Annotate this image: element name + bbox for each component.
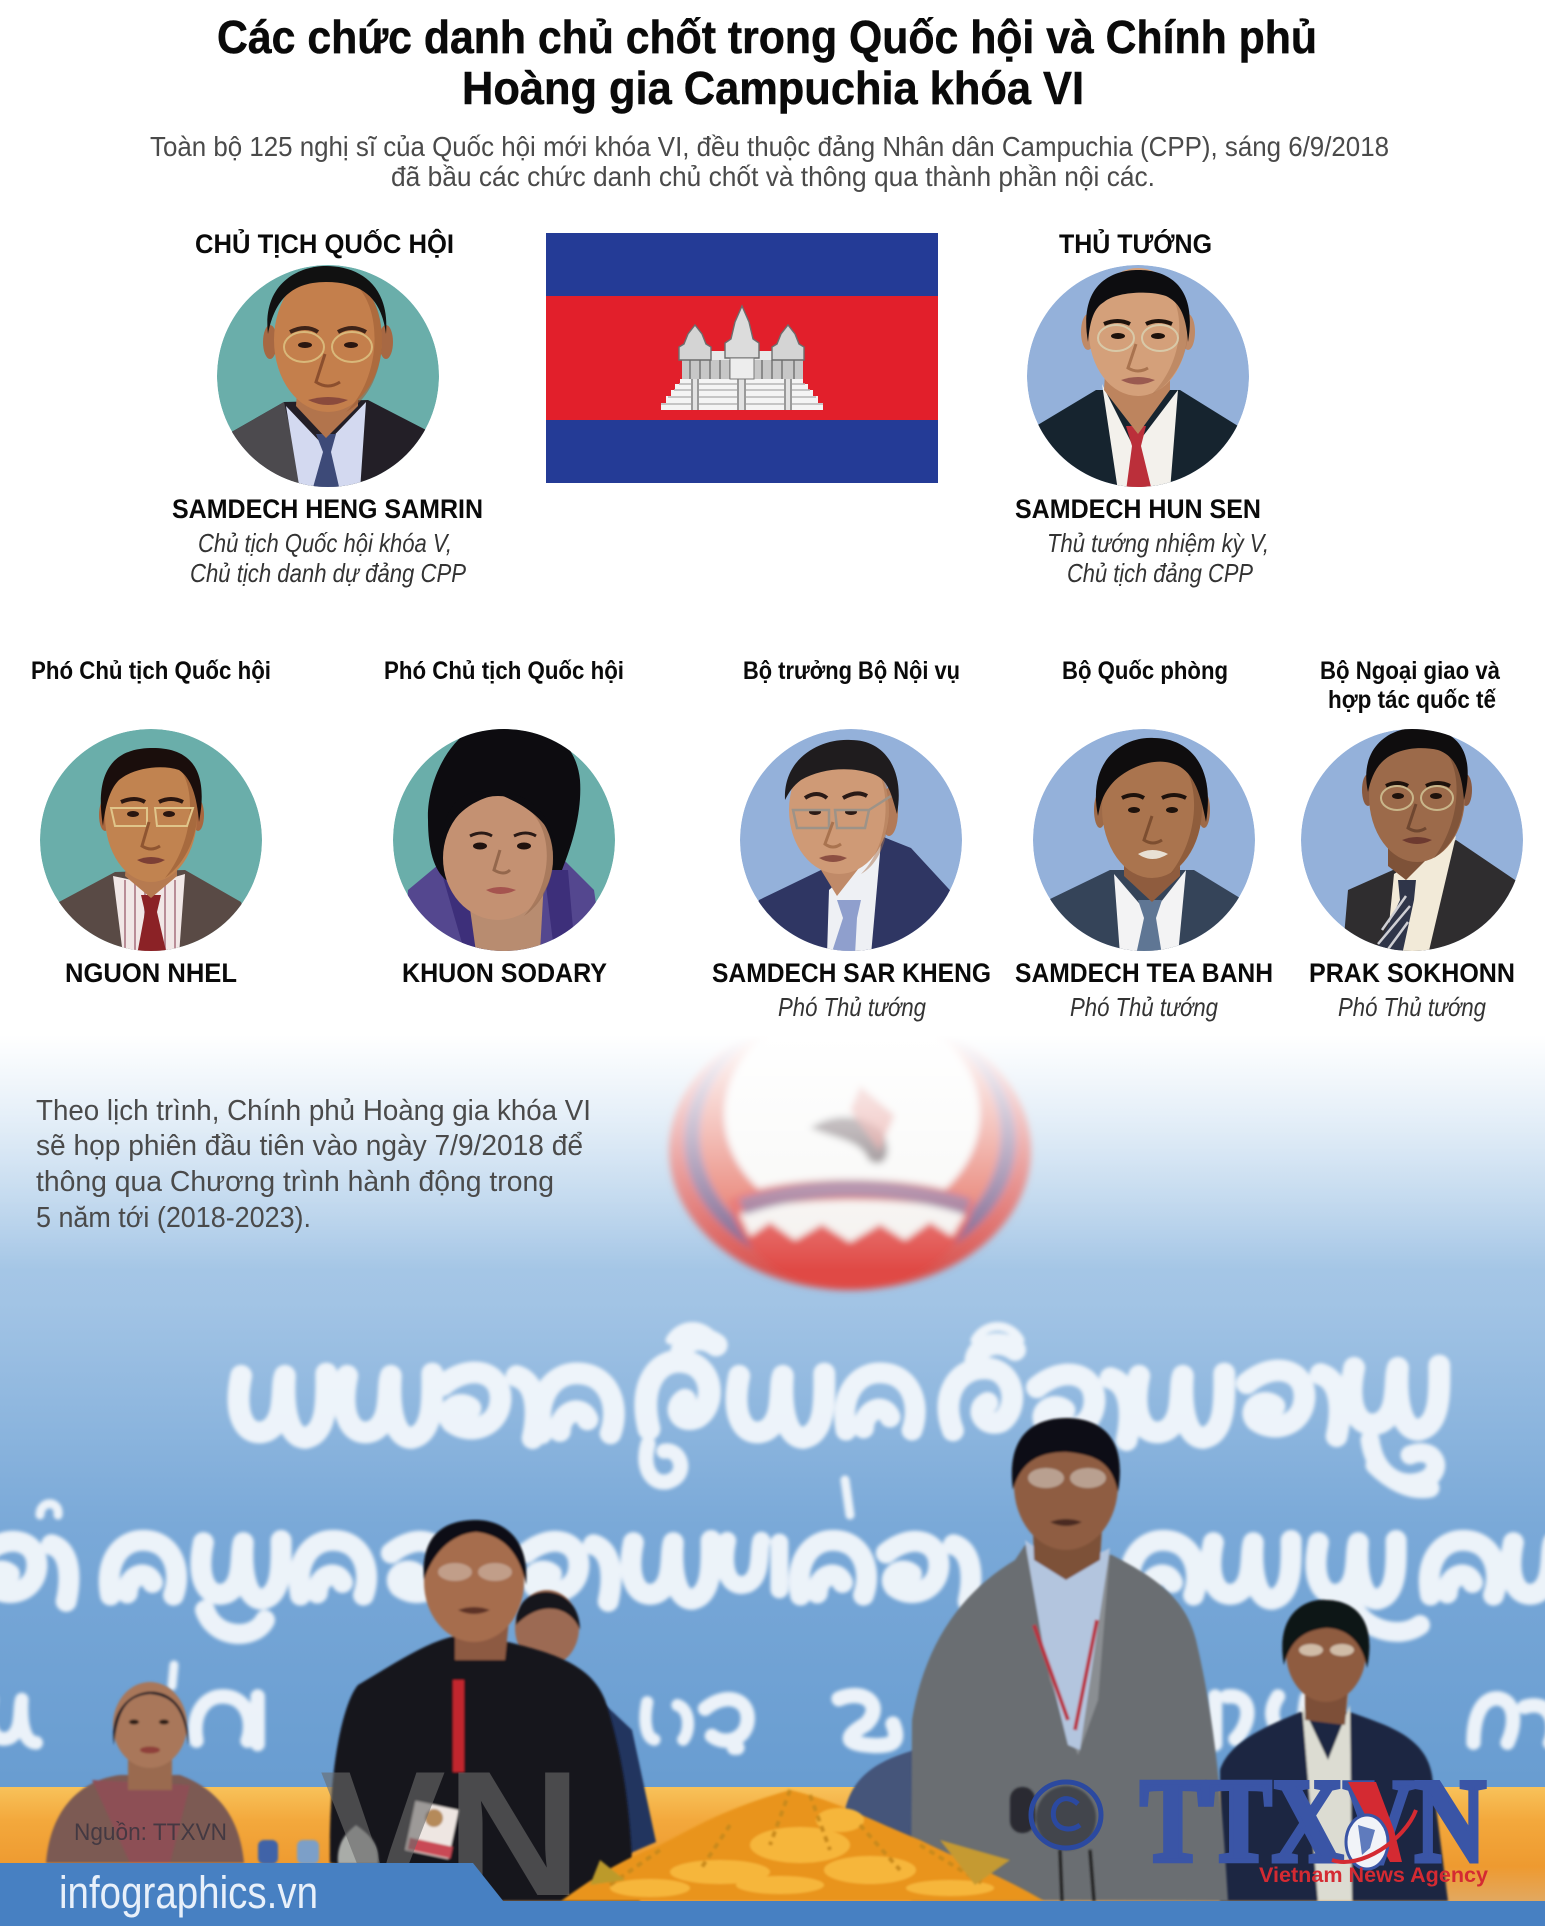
microphone	[1010, 1786, 1096, 1901]
orange stage band	[0, 1787, 1545, 1901]
name: NGUON NHEL	[65, 958, 237, 988]
name: SAMDECH HENG SAMRIN	[172, 494, 483, 524]
panel: Nguon Nhel	[31, 657, 271, 988]
name: KHUON SODARY	[402, 958, 607, 988]
title: Hoàng gia Campuchia khóa VI	[462, 62, 1084, 114]
person: Hun Sen in photo	[911, 1418, 1228, 1901]
subtitle: Toàn bộ 125 nghị sĩ của Quốc hội mới khóa VI, đều thuộc đảng Nhân dân Campuchia (CPP), sáng 6/9/2018	[150, 131, 1389, 162]
description: Phó Thủ tướng	[1338, 992, 1486, 1022]
text block: schedule note	[36, 1095, 591, 1234]
logo red V accent	[1348, 1782, 1402, 1862]
portrait: Prak Sokhonn	[1301, 728, 1524, 960]
person: man behind Heng Samrin	[515, 1590, 656, 1862]
role heading: Phó Chủ tịch Quốc hội	[384, 657, 624, 685]
title: Các chức danh chủ chốt trong Quốc hội và Chính phủ	[217, 11, 1317, 63]
description	[1047, 528, 1269, 588]
banner line one	[239, 1326, 1439, 1489]
role heading: hợp tác quốc tế	[1328, 686, 1496, 714]
role heading: Phó Chủ tịch Quốc hội	[31, 657, 271, 685]
panel: Chủ tịch Quốc hội	[172, 227, 483, 588]
person: man left of Hun Sen	[842, 1750, 930, 1860]
role heading: Bộ Quốc phòng	[1062, 657, 1228, 685]
flowers on podium	[561, 1790, 1044, 1901]
source credit: Nguồn: TTXVN	[74, 1819, 227, 1846]
flag of Cambodia	[546, 233, 938, 483]
name: PRAK SOKHONN	[1309, 958, 1515, 988]
panel: Prak Sokhonn	[1301, 657, 1524, 1022]
copyright circle mark	[1031, 1782, 1101, 1848]
banner lettering in photo, abstract blurred strokes	[0, 1326, 1545, 1748]
photo backdrop	[0, 1035, 1545, 1926]
flag temple emblem	[661, 306, 823, 410]
lanyard badge	[405, 1801, 459, 1859]
description: Phó Thủ tướng	[1070, 992, 1218, 1022]
party emblem on backdrop	[669, 1006, 1031, 1290]
role heading	[1320, 657, 1500, 714]
subtitle: đã bầu các chức danh chủ chốt và thông qua thành phần nội các.	[391, 161, 1155, 192]
role heading: CHỦ TỊCH QUỐC HỘI	[195, 227, 454, 259]
description: Chủ tịch đảng CPP	[1067, 558, 1254, 588]
white fade over photo	[0, 1035, 1545, 1270]
text block: schedule note: sẽ họp phiên đầu tiên vào ngày 7/9/2018 để	[36, 1130, 583, 1162]
name: SAMDECH HUN SEN	[1015, 494, 1261, 524]
logo caption: Vietnam News Agency	[1259, 1864, 1488, 1887]
panel: Thủ tướng	[1015, 227, 1269, 588]
portrait: Sar Kheng	[739, 729, 963, 960]
description: Phó Thủ tướng	[778, 992, 926, 1022]
logo globe	[1332, 1810, 1416, 1869]
subtitle	[150, 131, 1389, 192]
description	[190, 528, 467, 588]
name: SAMDECH SAR KHENG	[712, 958, 991, 988]
person: Heng Samrin in photo	[330, 1520, 640, 1901]
footer site name: infographics.vn	[59, 1867, 318, 1918]
panel: Sar Kheng	[712, 657, 991, 1022]
role heading: THỦ TƯỚNG	[1059, 227, 1212, 259]
portrait: Hun Sen	[1026, 265, 1250, 496]
panel: Tea Banh	[1015, 657, 1273, 1022]
text block: schedule note: Theo lịch trình, Chính phủ Hoàng gia khóa VI	[36, 1095, 591, 1127]
person: right man in photo	[1220, 1600, 1448, 1901]
banner line three	[0, 1665, 1545, 1748]
role heading: Bộ trưởng Bộ Nội vụ	[743, 657, 960, 685]
person: woman at left	[46, 1682, 244, 1863]
text block: schedule note: thông qua Chương trình hành động trong	[36, 1166, 554, 1198]
description: Chủ tịch danh dự đảng CPP	[190, 558, 467, 588]
portrait: Tea Banh	[1032, 729, 1256, 960]
panel: Khuon Sodary	[384, 657, 624, 988]
description: Thủ tướng nhiệm kỳ V,	[1047, 528, 1269, 558]
banner line two	[0, 1480, 1545, 1634]
portrait: Nguon Nhel	[39, 729, 263, 960]
white upper cover	[0, 0, 1545, 1036]
role heading: Bộ Ngoại giao và	[1320, 657, 1500, 685]
portrait: Khuon Sodary	[393, 720, 615, 960]
description: Chủ tịch Quốc hội khóa V,	[198, 528, 452, 558]
table bottles	[258, 1825, 378, 1864]
title	[217, 11, 1317, 114]
footer bar	[0, 1863, 1545, 1926]
text block: schedule note: 5 năm tới (2018-2023).	[36, 1202, 311, 1234]
portrait: Heng Samrin	[216, 265, 440, 496]
name: SAMDECH TEA BANH	[1015, 958, 1273, 988]
